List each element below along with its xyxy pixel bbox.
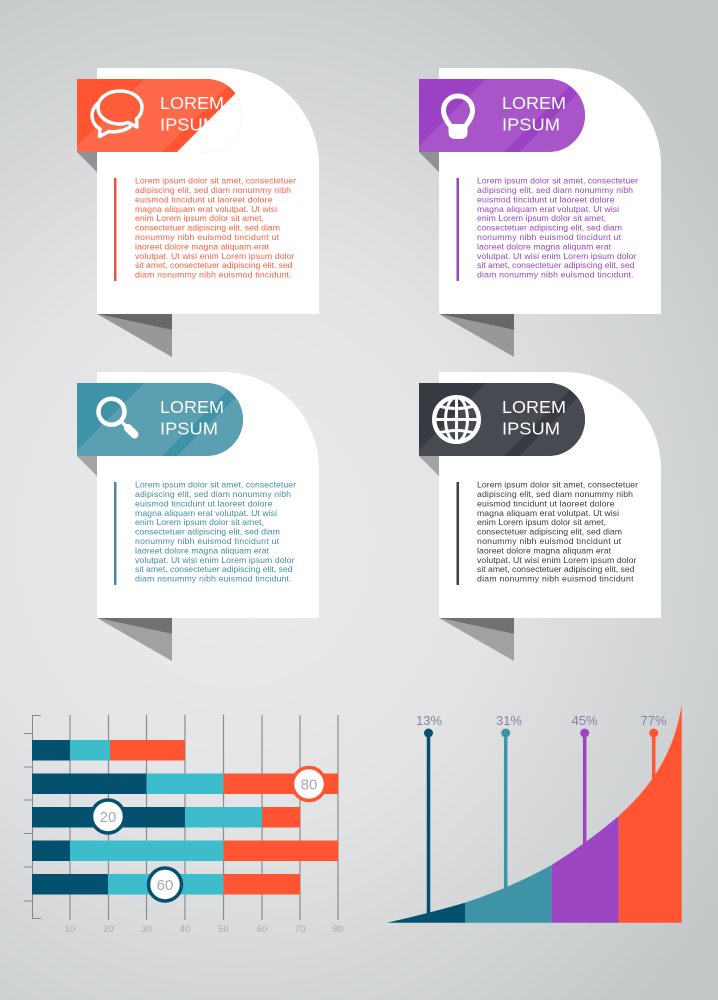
marker: 80: 80 [301, 776, 317, 794]
accent bar [456, 178, 459, 281]
body text: euismod tincidunt ut laoreet dolore [477, 194, 615, 204]
body text: Lorem ipsum dolor sit amet, consectetuer [477, 176, 638, 186]
pin: 77% [640, 713, 667, 780]
axis labels: 10 [65, 924, 75, 935]
accent bar [114, 178, 116, 281]
body text: diam nonummy nibh euismod tincidunt. [135, 270, 292, 280]
pin: 45% [571, 713, 598, 846]
panel: teal search card [77, 372, 337, 661]
body text: sit amet, consectetuer adipiscing elit, sed [135, 260, 293, 270]
heading: lorem ipsum: IPSUM [160, 114, 218, 134]
bar row 3 [32, 807, 300, 828]
heading: lorem ipsum: LOREM [502, 93, 566, 113]
heading: lorem ipsum [502, 93, 566, 134]
heading: lorem ipsum [160, 93, 224, 134]
fold shadows [77, 152, 172, 357]
axis labels: 30 [141, 924, 152, 935]
body text: nonummy nibh euismod tincidunt ut [135, 536, 280, 546]
body text [135, 480, 296, 584]
icon: magnifying glass [98, 399, 134, 434]
accent bar [114, 482, 116, 585]
body text [477, 480, 638, 584]
icon: speech bubbles [92, 91, 142, 136]
body text: laoreet dolore magna aliquam erat [135, 545, 270, 555]
stacked bar chart [24, 715, 343, 935]
heading: lorem ipsum: IPSUM [502, 418, 560, 438]
body text: consectetuer adipiscing elit, sed diam [477, 223, 622, 233]
body text: euismod tincidunt ut laoreet dolore [135, 194, 273, 204]
bar row 5 [32, 874, 300, 894]
axis labels: 20 [103, 924, 114, 935]
body text: adipiscing elit, sed diam nonummy nibh [477, 185, 633, 195]
body text: magna aliquam erat volutpat. Ut wisi [135, 204, 277, 214]
card body [97, 68, 319, 314]
body text: magna aliquam erat volutpat. Ut wisi [477, 204, 619, 214]
body text: euismod tincidunt ut laoreet dolore [135, 498, 273, 508]
bar row 2 [32, 774, 338, 794]
pin: 13%: 13% [416, 713, 442, 728]
axis labels: 80 [333, 924, 343, 935]
heading: lorem ipsum [160, 397, 224, 438]
body text [477, 176, 638, 280]
panel: purple bulb card [419, 68, 679, 357]
card body [439, 372, 661, 618]
ribbon: orange heading [77, 79, 240, 152]
body text: volutpat. Ut wisi enim Lorem ipsum dolor [477, 555, 637, 565]
body text: diam nonummy nibh euismod tincidunt. [135, 574, 292, 584]
pin: 45%: 45% [571, 713, 598, 728]
fold shadows [77, 456, 172, 661]
body text: adipiscing elit, sed diam nonummy nibh [135, 185, 291, 195]
heading: lorem ipsum: IPSUM [502, 114, 560, 134]
marker: 60 [148, 868, 182, 901]
body text: magna aliquam erat volutpat. Ut wisi [477, 508, 619, 518]
heading: lorem ipsum: IPSUM [160, 418, 218, 438]
body text: magna aliquam erat volutpat. Ut wisi [135, 508, 277, 518]
body text: Lorem ipsum dolor sit amet, consectetuer [135, 176, 296, 186]
body text: Lorem ipsum dolor sit amet, consectetuer [135, 480, 296, 490]
body text: sit amet, consectetuer adipiscing elit, sed [477, 564, 635, 574]
body text: laoreet dolore magna aliquam erat [477, 241, 612, 251]
body text: sit amet, consectetuer adipiscing elit, sed [135, 564, 293, 574]
fold shadows [419, 152, 514, 357]
heading: lorem ipsum: LOREM [160, 397, 224, 417]
body text: laoreet dolore magna aliquam erat [135, 241, 270, 251]
panel: dark globe card [419, 372, 679, 661]
icon: light bulb [444, 96, 472, 139]
body text: enim Lorem ipsum dolor sit amet, [477, 517, 606, 527]
axis labels: 40 [180, 924, 190, 935]
body text: euismod tincidunt ut laoreet dolore [477, 498, 615, 508]
marker: 20 [92, 800, 124, 833]
axis labels [65, 924, 343, 935]
body text: diam nonummy nibh euismod tincidunt [477, 574, 634, 584]
body text: volutpat. Ut wisi enim Lorem ipsum dolor [135, 251, 295, 261]
body text: nonummy nibh euismod tincidunt ut [135, 232, 280, 242]
body text: enim Lorem ipsum dolor sit amet, [477, 213, 606, 223]
body text: nonummy nibh euismod tincidunt ut [477, 232, 622, 242]
heading: lorem ipsum: LOREM [502, 397, 566, 417]
body text: volutpat. Ut wisi enim Lorem ipsum dolor [135, 555, 295, 565]
pin: 31% [496, 713, 522, 888]
ribbon: dark heading [419, 383, 585, 456]
icon: globe [434, 397, 479, 442]
ribbon: teal heading [77, 383, 243, 456]
card body [97, 372, 319, 618]
axis labels: 60 [257, 924, 267, 935]
body text: consectetuer adipiscing elit, sed diam [477, 527, 622, 537]
body text: consectetuer adipiscing elit, sed diam [135, 223, 280, 233]
area curve chart [387, 705, 682, 923]
body text: sit amet, consectetuer adipiscing elit, sed [477, 260, 635, 270]
accent bar [456, 482, 459, 585]
body text: adipiscing elit, sed diam nonummy nibh [135, 489, 291, 499]
fold shadows [419, 456, 514, 661]
heading: lorem ipsum: LOREM [160, 93, 224, 113]
marker: 60: 60 [157, 877, 173, 894]
body text: volutpat. Ut wisi enim Lorem ipsum dolor [477, 251, 637, 261]
body text: nonummy nibh euismod tincidunt ut [477, 536, 622, 546]
heading: lorem ipsum [502, 397, 566, 438]
body text: adipiscing elit, sed diam nonummy nibh [477, 489, 633, 499]
peeled corner covering the ribbon [177, 93, 250, 152]
pin: 31%: 31% [496, 713, 522, 728]
body text: enim Lorem ipsum dolor sit amet, [135, 517, 264, 527]
body text: diam nonummy nibh euismod tincidunt. [477, 270, 634, 280]
bar row 4 [32, 840, 338, 861]
pin: 13% [416, 713, 442, 915]
body text: Lorem ipsum dolor sit amet, consectetuer [477, 480, 638, 490]
bar row 1 [32, 740, 185, 760]
marker: 80 [292, 768, 326, 800]
card body [439, 68, 661, 314]
panel: orange speech card [77, 68, 337, 357]
axis labels: 50 [218, 924, 229, 935]
body text: laoreet dolore magna aliquam erat [477, 545, 612, 555]
pin: 77%: 77% [640, 713, 667, 728]
body text [135, 176, 296, 280]
ribbon: purple heading [419, 79, 585, 152]
area segments [387, 705, 682, 923]
axis labels: 70 [295, 924, 305, 935]
body text: consectetuer adipiscing elit, sed diam [135, 527, 280, 537]
marker: 20: 20 [100, 809, 116, 826]
body text: enim Lorem ipsum dolor sit amet, [135, 213, 264, 223]
